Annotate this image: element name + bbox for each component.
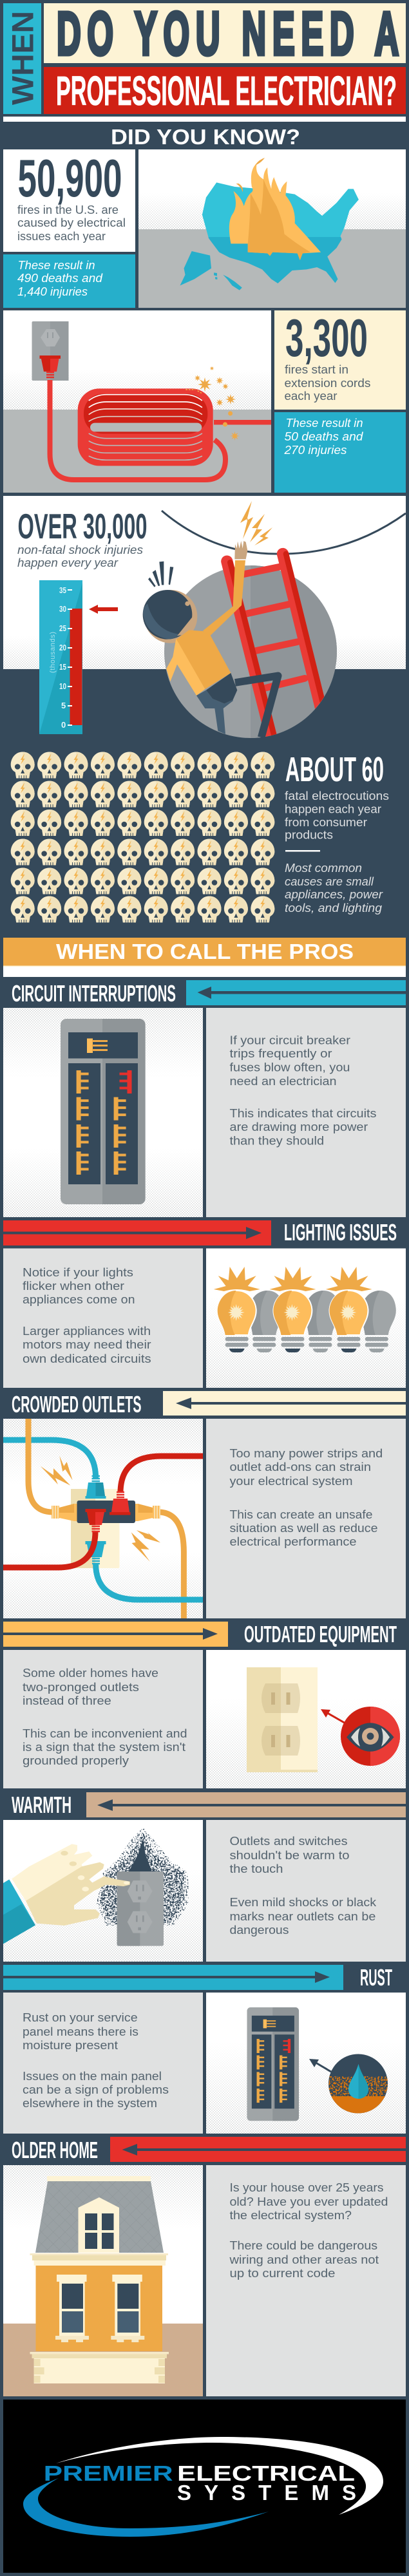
panel: circuit interruptions text: than they should — [229, 1133, 324, 1148]
panel: warmth text: dangerous — [229, 1923, 289, 1937]
stat text: about 60: tools, and lighting — [285, 901, 383, 914]
panel: older home text: wiring and other areas not — [229, 2253, 379, 2266]
panel: 50,900 fires stat: issues each year — [17, 229, 106, 243]
panel: deaths and injuries from cords: 50 deaths and — [285, 430, 363, 443]
panel: warmth text: Even mild shocks or black — [229, 1895, 377, 1909]
footer: company logo — [3, 2400, 406, 2573]
icon: US map on fire — [180, 158, 359, 290]
icon: sparks of electricity — [41, 1456, 160, 1562]
panel: deaths and injuries from cords — [274, 412, 406, 493]
header title block — [3, 0, 406, 114]
panel: older home text: old? Have you ever updated — [229, 2195, 388, 2208]
panel: 3,300 fires stat: each year — [285, 389, 338, 402]
panel: 50,900 fires stat — [3, 148, 135, 252]
panel: circuit interruptions text: This indicates that circuits — [229, 1106, 376, 1120]
panel: non-fatal shock injuries — [3, 496, 406, 734]
title line: Do you need a: DO YOU NEED A — [57, 0, 405, 68]
panel: outdated equipment text: instead of three — [23, 1694, 111, 1707]
panel: 50,900 fires stat: caused by electrical — [17, 216, 126, 229]
panel: crowded outlets text: electrical performance — [229, 1535, 357, 1548]
icon: hand touching outlet — [3, 1844, 130, 1944]
panel: crowded outlets text: This can create an unsafe — [229, 1508, 372, 1521]
stat text: about 60: happen each year — [285, 802, 381, 815]
panel: outdated equipment text: two-pronged outlets — [23, 1680, 139, 1694]
panel: outdated equipment text: This can be inconvenient and — [23, 1727, 187, 1740]
icon: grey circle backdrop — [164, 565, 337, 738]
panel: rust text — [3, 1993, 203, 2134]
icon: wall outlet with plug — [32, 321, 68, 381]
banner: when to call the pros — [3, 938, 406, 966]
chart: thermometer scale to 30 thousand: 20 — [59, 643, 66, 652]
chart: thermometer scale to 30 thousand: 15 — [59, 662, 66, 672]
icon: inspect eye callout — [321, 1707, 400, 1766]
skull grid: 60 fatal electrocutions — [11, 752, 274, 922]
panel: older home text: There could be dangerous — [229, 2239, 377, 2252]
chart: thermometer scale to 30 thousand: 5 — [61, 701, 66, 710]
logo wordmark — [44, 2461, 356, 2505]
icon: plugs — [3, 1476, 160, 1567]
panel: outdated equipment text: is a sign that the system isn't — [23, 1740, 185, 1754]
icon: electrician figure — [143, 541, 278, 737]
panel: lighting issues text: flicker when other — [23, 1279, 124, 1293]
chart: thermometer scale to 30 thousand: (thousands) — [49, 632, 57, 673]
section header: warmth: WARMTH — [12, 1792, 71, 1818]
panel: crowded power strip illustration — [3, 1419, 203, 1618]
section header: rust — [3, 1964, 392, 1991]
section header: crowded outlets — [12, 1391, 406, 1417]
panel: circuit interruptions text: trips frequently or — [229, 1046, 332, 1060]
chart: thermometer scale to 30 thousand: 35 — [59, 585, 66, 595]
section header: warmth — [12, 1792, 406, 1818]
panel: warmth text: marks near outlets can be — [229, 1909, 376, 1923]
chart: thermometer scale to 30 thousand: 10 — [59, 681, 66, 691]
panel: rust text: can be a sign of problems — [23, 2083, 169, 2096]
panel: warm outlet illustration — [3, 1820, 203, 1962]
stat text: about 60: causes are small — [285, 875, 374, 888]
panel: rust text: Issues on the main panel — [23, 2069, 162, 2083]
stat text: over 30,000: OVER 30,000 — [18, 506, 147, 546]
panel: crowded outlets text: your electrical system — [229, 1474, 353, 1488]
panel: deaths and injuries from fires: These result in — [18, 258, 95, 272]
side label: WHEN: WHEN — [5, 11, 40, 105]
panel: older home illustration — [3, 2165, 203, 2396]
logo wordmark: PREMIER — [44, 2461, 173, 2485]
arrow: pointing at 30 — [89, 605, 118, 614]
panel: 3,300 fires stat: fires start in — [285, 363, 348, 376]
panel: crowded outlets text: Too many power strips and — [229, 1446, 383, 1460]
panel: outdated equipment text: grounded properly — [23, 1754, 129, 1767]
icon: coiled red extension cord — [50, 380, 271, 480]
section header: outdated equipment — [3, 1621, 397, 1647]
stat text: over 30,000: non-fatal shock injuries — [17, 543, 143, 556]
panel: 50,900 fires stat: 50,900 — [18, 148, 122, 208]
panel: extension cord illustration — [3, 310, 271, 493]
panel: circuit interruptions text: fuses blow often, you — [229, 1060, 350, 1074]
panel: deaths and injuries from fires: 1,440 injuries — [17, 285, 88, 298]
heading: did you know: DID YOU KNOW? — [111, 126, 300, 149]
panel: deaths and injuries from cords: These result in — [286, 416, 363, 430]
icon: row of bulbs — [214, 1267, 396, 1352]
icon: electric bolts — [240, 501, 272, 545]
icon: ladder — [227, 554, 324, 739]
chart: thermometer scale to 30 thousand: 30 — [59, 604, 66, 614]
stat text: about 60: fatal electrocutions — [285, 789, 389, 802]
panel: rust text: panel means there is — [23, 2025, 138, 2038]
stat text: about 60 — [285, 750, 389, 914]
chart: thermometer scale to 30 thousand — [39, 580, 82, 734]
panel: circuit interruptions text: If your circuit breaker — [229, 1033, 350, 1047]
icon: moisture and rust callout — [309, 2054, 388, 2114]
icon: wall plate — [71, 1489, 120, 1568]
section header: older home: OLDER HOME — [12, 2137, 98, 2163]
panel: two-pronged outlet illustration — [206, 1650, 406, 1788]
panel: rust text: moisture present — [23, 2038, 118, 2052]
icon: logo swooshes — [23, 2437, 383, 2537]
panel: lighting issues text: Larger appliances with — [23, 1324, 151, 1338]
stat text: about 60: products — [285, 828, 333, 841]
panel: older home text — [206, 2165, 406, 2396]
panel: deaths and injuries from fires — [3, 254, 135, 308]
panel: lighting issues text: appliances come on — [23, 1293, 135, 1306]
panel: 3,300 fires stat — [274, 308, 406, 410]
panel: breaker box illustration — [3, 1008, 203, 1217]
panel: older home text: the electrical system? — [229, 2208, 352, 2222]
panel: warmth text — [206, 1820, 406, 1962]
panel: crowded outlets text: situation as well as reduce — [229, 1521, 377, 1535]
panel: 3,300 fires stat: extension cords — [285, 376, 371, 390]
icon: breaker panel — [61, 1019, 146, 1204]
panel: flickering light bulbs — [206, 1248, 406, 1388]
chart: thermometer scale to 30 thousand: 0 — [61, 720, 66, 730]
panel: lighting issues text: own dedicated circuits — [23, 1352, 151, 1365]
icon: wall outlet — [117, 1871, 164, 1946]
stat text: over 30,000 — [17, 506, 147, 569]
icon: power strip — [77, 1501, 135, 1523]
icon: sparks — [195, 366, 240, 440]
panel: deaths and injuries from fires: 490 deaths and — [17, 271, 103, 285]
stat text: about 60: from consumer — [285, 815, 367, 829]
stat text: about 60: appliances, power — [285, 887, 383, 901]
stat text: about 60: Most common — [285, 861, 362, 875]
section header: circuit interruptions: CIRCUIT INTERRUPTIONS — [12, 980, 176, 1007]
section header: crowded outlets: CROWDED OUTLETS — [12, 1391, 142, 1417]
section header: older home — [12, 2137, 406, 2163]
logo wordmark: ELECTRICAL — [177, 2461, 355, 2485]
icon: small breaker panel — [247, 2007, 299, 2121]
panel: lighting issues text — [3, 1248, 203, 1388]
panel: rust text: elsewhere in the system — [23, 2096, 157, 2110]
panel: rusty service panel illustration — [206, 1993, 406, 2134]
panel: circuit interruptions text — [206, 1008, 406, 1217]
panel: deaths and injuries from cords: 270 injuries — [283, 443, 347, 457]
icon: two-pronged outlet — [247, 1667, 318, 1772]
panel: outdated equipment text: Some older homes have — [23, 1666, 158, 1680]
chart: thermometer scale to 30 thousand: 25 — [59, 623, 66, 633]
panel: older home text: up to current code — [229, 2266, 335, 2280]
panel: crowded outlets text — [206, 1419, 406, 1618]
panel: rust text: Rust on your service — [23, 2011, 138, 2024]
icon: tangled wires — [3, 1419, 203, 1618]
panel: crowded outlets text: outlet add-ons can strain — [229, 1460, 371, 1473]
illustration: man shocked on ladder — [143, 501, 406, 739]
panel: circuit interruptions text: need an electrician — [229, 1074, 336, 1088]
section header: lighting issues — [3, 1219, 397, 1245]
panel: warmth text: Outlets and switches — [229, 1834, 348, 1848]
panel: burning US map — [138, 149, 406, 308]
panel: lighting issues text: Notice if your lights — [23, 1265, 133, 1279]
panel: 50,900 fires stat: fires in the U.S. are — [17, 203, 119, 216]
panel: warmth text: shouldn't be warm to — [229, 1848, 349, 1862]
panel: older home text: Is your house over 25 years — [229, 2181, 384, 2194]
panel: circuit interruptions text: are drawing more power — [229, 1120, 368, 1133]
panel: outdated equipment text — [3, 1650, 203, 1788]
icon: power line — [162, 511, 406, 554]
panel: warmth text: the touch — [229, 1862, 283, 1875]
panel: lighting issues text: motors may need their — [23, 1338, 151, 1351]
logo wordmark: SYSTEMS — [177, 2481, 356, 2505]
icon: scorch marks — [97, 1828, 189, 1926]
stat text: over 30,000: happen every year — [17, 556, 119, 569]
icon: old house — [30, 2176, 169, 2383]
banner: when to call the pros: WHEN TO CALL THE PROS — [56, 940, 354, 963]
